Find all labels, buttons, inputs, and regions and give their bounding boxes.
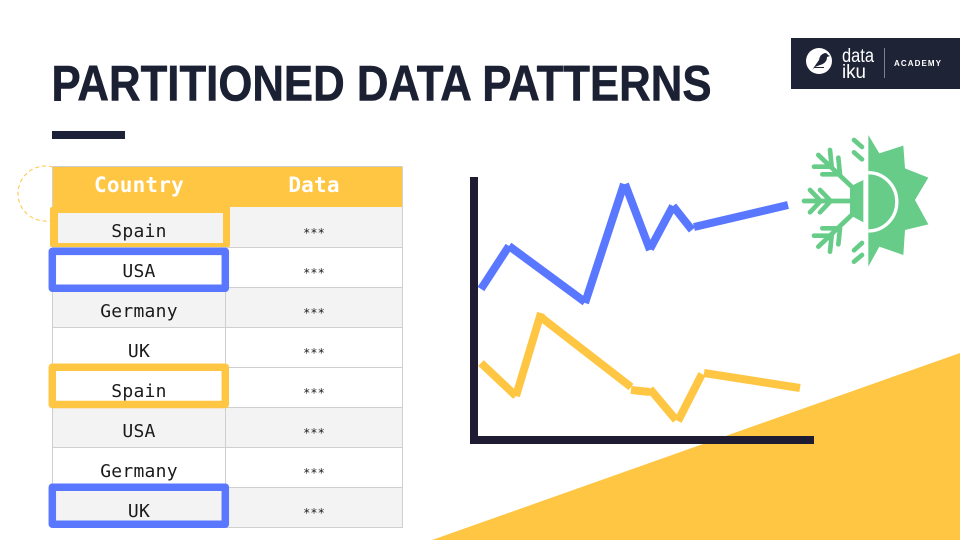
highlight: Spain row 1 bbox=[50, 207, 230, 247]
yellow line bbox=[481, 313, 800, 421]
table rows: *** bbox=[303, 266, 325, 280]
table header bbox=[52, 166, 402, 207]
table rows: *** bbox=[303, 506, 325, 520]
logo: dataiku academy: ACADEMY bbox=[894, 59, 942, 68]
table rows: *** bbox=[303, 466, 325, 480]
highlight: USA row 1 bbox=[52, 251, 225, 288]
icon: snowflake and sun bbox=[804, 135, 928, 267]
table rows: USA bbox=[122, 421, 156, 442]
blue line bbox=[481, 184, 788, 303]
table rows: Spain bbox=[111, 381, 167, 402]
table rows: *** bbox=[303, 346, 325, 360]
table bbox=[52, 166, 402, 528]
table rows: Spain bbox=[111, 221, 167, 242]
table header: Country bbox=[94, 173, 184, 197]
table rows: *** bbox=[303, 306, 325, 320]
table rows bbox=[52, 167, 402, 528]
table rows: Germany bbox=[100, 301, 178, 322]
title: PARTITIONED DATA PATTERNS bbox=[52, 54, 712, 112]
table rows: USA bbox=[122, 261, 156, 282]
background triangle bbox=[432, 353, 960, 540]
highlight: Spain row 2 bbox=[52, 367, 225, 404]
line chart bbox=[474, 177, 814, 440]
table header: Data bbox=[288, 173, 340, 197]
title underline bbox=[52, 131, 125, 139]
table rows: *** bbox=[303, 386, 325, 400]
logo: dataiku academy bbox=[791, 38, 960, 89]
logo: dataiku academy: iku bbox=[842, 62, 866, 83]
decorative dashed circle bbox=[18, 166, 73, 221]
logo: dataiku academy: data bbox=[842, 46, 874, 67]
table rows: *** bbox=[303, 426, 325, 440]
highlight: UK row 2 bbox=[52, 487, 225, 524]
table rows: *** bbox=[303, 226, 325, 240]
table rows: UK bbox=[128, 501, 150, 522]
chart axes bbox=[474, 177, 814, 440]
table rows: Germany bbox=[100, 461, 178, 482]
table rows: UK bbox=[128, 341, 150, 362]
